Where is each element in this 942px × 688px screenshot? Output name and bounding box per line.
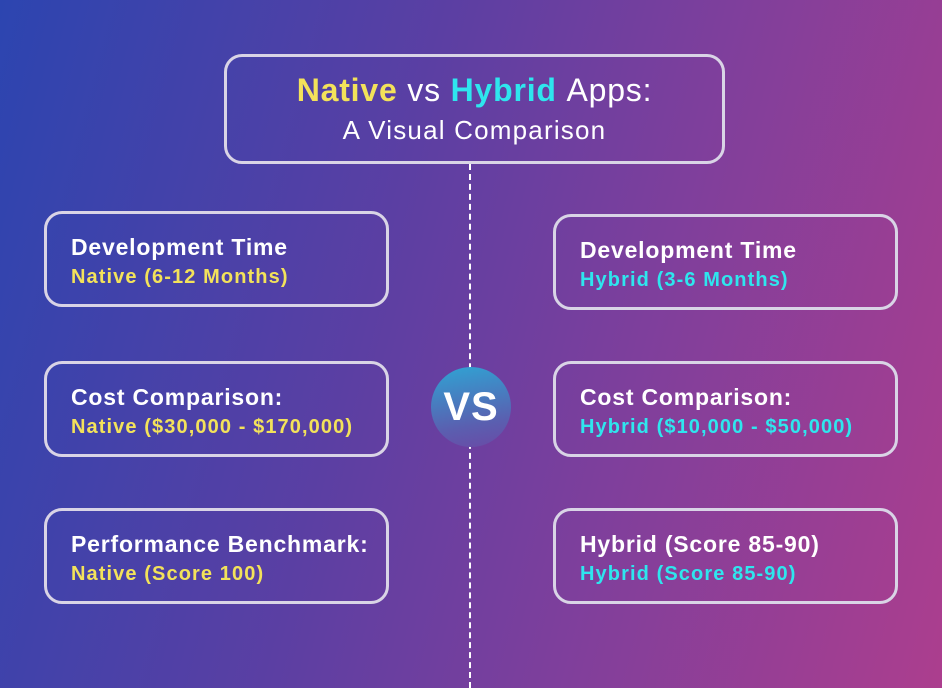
- panel: native performance: Performance Benchmark:: [71, 531, 369, 557]
- panel: hybrid cost: Hybrid ($10,000 - $50,000): [580, 416, 853, 438]
- panel: hybrid development time: Development Time: [580, 237, 797, 263]
- panel: hybrid cost: [553, 361, 898, 457]
- panel: native performance: [44, 508, 389, 604]
- dashed divider: [469, 164, 471, 688]
- panel: native development time: Development Time: [71, 234, 288, 260]
- panel: native development time: [44, 211, 389, 307]
- panel: native cost: Cost Comparison:: [71, 384, 283, 410]
- panel: hybrid cost: Cost Comparison:: [580, 384, 792, 410]
- panel: hybrid performance: [553, 508, 898, 604]
- panel: hybrid performance: Hybrid (Score 85-90): [580, 563, 797, 585]
- icon: VS circle: VS: [443, 385, 499, 429]
- title box: A Visual Comparison: [343, 115, 606, 145]
- icon: VS circle: [431, 367, 511, 447]
- panel: hybrid performance: Hybrid (Score 85-90): [580, 531, 820, 557]
- panel: native cost: [44, 361, 389, 457]
- panel: native development time: Native (6-12 Months): [71, 266, 289, 288]
- panel: native performance: Native (Score 100): [71, 563, 264, 585]
- panel: native cost: Native ($30,000 - $170,000): [71, 416, 353, 438]
- title box: Native vs Hybrid Apps:: [297, 72, 652, 108]
- panel: hybrid development time: Hybrid (3-6 Months): [580, 269, 789, 291]
- title box: [224, 54, 725, 164]
- panel: hybrid development time: [553, 214, 898, 310]
